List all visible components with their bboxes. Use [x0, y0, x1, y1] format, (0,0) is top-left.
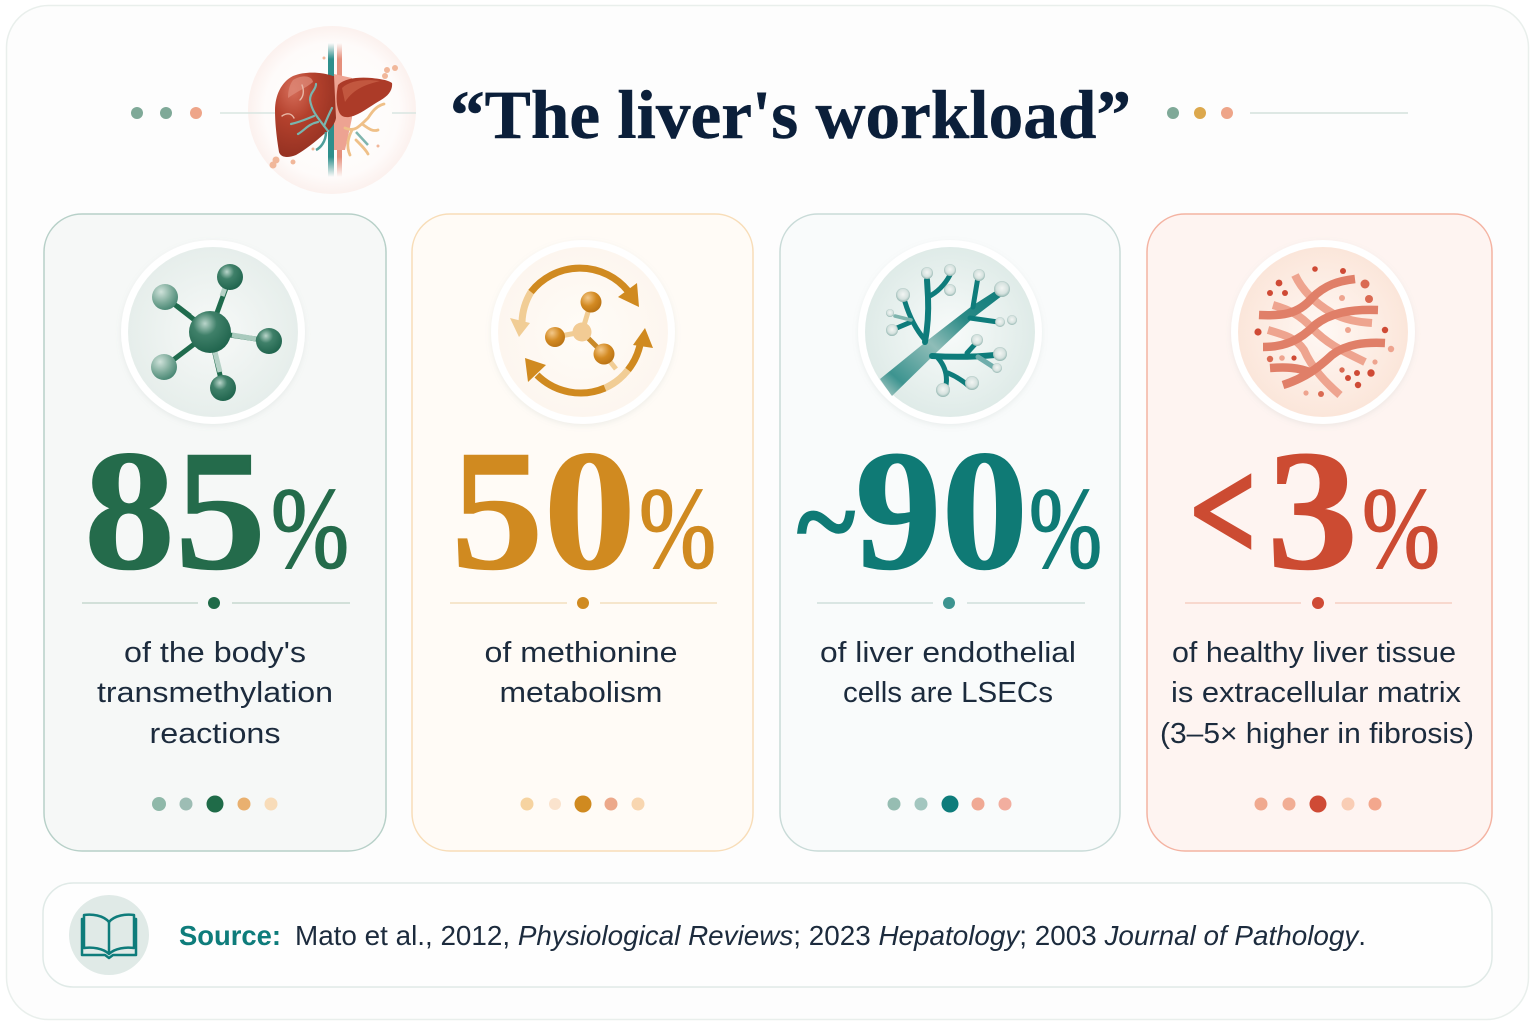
icon: branching vessel — [858, 240, 1042, 424]
divider — [817, 597, 1085, 609]
stat: ~90%: ~ — [797, 458, 855, 585]
title: “The liver's workload” — [450, 77, 1131, 153]
icon: open book — [69, 895, 149, 975]
stat: 85%: % — [271, 465, 349, 593]
icon: liver — [220, 26, 416, 194]
description — [1160, 637, 1474, 750]
description: of healthy liver tissue — [1172, 637, 1456, 669]
stat: ~90% — [797, 416, 1102, 606]
panel: source — [43, 883, 1492, 987]
description: of methionine — [484, 637, 678, 669]
divider — [450, 597, 717, 609]
icon: cycle molecule — [491, 240, 675, 424]
icon: collagen fibres — [1231, 240, 1415, 424]
description — [484, 637, 678, 709]
stat: <3%: 3 — [1267, 416, 1358, 606]
panel: ~90% LSECs — [780, 214, 1120, 851]
description: is extracellular matrix — [1171, 677, 1462, 709]
stat: 85%: 85 — [84, 416, 266, 606]
stat: 50%: % — [639, 465, 716, 593]
description: metabolism — [500, 677, 662, 709]
stat: 50% — [451, 416, 716, 606]
stat: ~90%: % — [1029, 465, 1102, 593]
description: transmethylation — [97, 677, 333, 709]
source text: Mato et al., 2012, Physiological Reviews; 2023 Hepatology; 2003 Journal of Pathology. — [295, 920, 1366, 951]
pagination dots — [1254, 796, 1382, 812]
panel: 85% transmethylation — [44, 214, 386, 851]
right header dots — [1167, 107, 1408, 119]
pagination dots — [520, 796, 644, 812]
header — [131, 26, 1408, 194]
stat: 85% — [84, 416, 349, 606]
stat: <3% — [1190, 416, 1440, 606]
description: of liver endothelial — [820, 637, 1076, 669]
stat: <3%: % — [1362, 465, 1440, 593]
description: reactions — [150, 718, 280, 750]
panel: 50% methionine — [412, 214, 753, 851]
source text: Source: — [179, 920, 281, 951]
icon: molecule — [121, 240, 305, 424]
divider — [82, 597, 350, 609]
pagination dots — [152, 796, 278, 812]
description — [97, 637, 333, 750]
description: (3–5× higher in fibrosis) — [1160, 718, 1474, 750]
divider — [1185, 597, 1452, 609]
description: cells are LSECs — [843, 677, 1053, 709]
description: of the body's — [124, 637, 306, 669]
panel: <3% extracellular matrix — [1147, 214, 1492, 851]
stat: 50%: 50 — [451, 416, 636, 606]
stat: <3%: < — [1190, 434, 1256, 589]
stat: ~90%: 90 — [855, 416, 1028, 606]
pagination dots — [888, 796, 1012, 812]
description — [820, 637, 1076, 709]
left header dots — [131, 107, 202, 119]
